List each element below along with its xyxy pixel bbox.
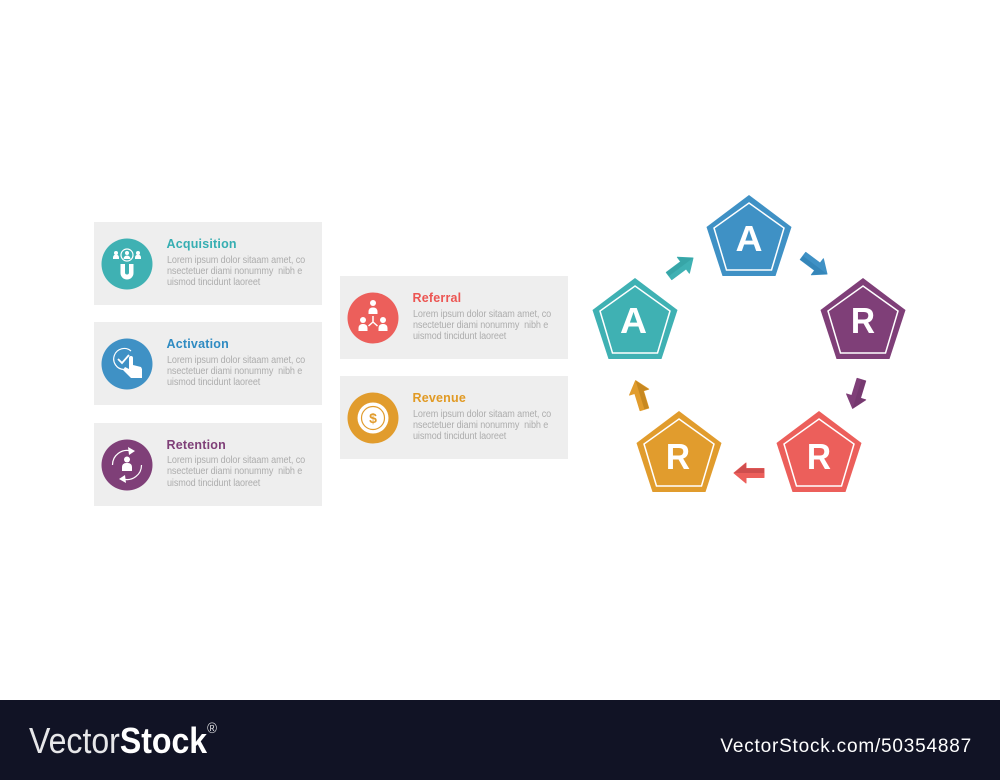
description: Lorem ipsum dolor sitaam amet, co nsectetuer diami nonummy nibh e uismod tincidunt laoreet — [166, 354, 305, 388]
heading: Revenue — [412, 391, 466, 405]
card: Acquisition — [94, 222, 322, 305]
heading: Acquisition — [166, 237, 237, 251]
description: Lorem ipsum dolor sitaam amet, co nsectetuer diami nonummy nibh e uismod tincidunt laoreet — [166, 254, 305, 288]
pentagon: Referral R: R — [807, 438, 831, 477]
pentagon: Retention R: R — [851, 302, 875, 341]
pentagon: Activation A: A — [735, 219, 763, 259]
pentagon: Acquisition A: A — [620, 301, 647, 341]
card: Retention — [94, 422, 322, 506]
description: Lorem ipsum dolor sitaam amet, co nsectetuer diami nonummy nibh e uismod tincidunt laoreet — [412, 408, 551, 442]
description: Lorem ipsum dolor sitaam amet, co nsectetuer diami nonummy nibh e uismod tincidunt laoreet — [412, 308, 551, 342]
heading: Activation — [166, 337, 229, 351]
watermark bar — [0, 700, 1000, 780]
icon: magnet attracting people — [102, 238, 152, 290]
card: Revenue — [340, 376, 568, 459]
pentagon: Referral R — [776, 411, 862, 492]
card: Activation — [94, 322, 322, 405]
icon: hand tapping checkmark — [102, 338, 152, 390]
arrow: blue to purple — [797, 248, 833, 282]
pentagon: Activation A — [706, 195, 792, 276]
image id: VectorStock.com/50354887 — [720, 736, 972, 757]
heading: Referral — [412, 291, 461, 305]
icon: referral network of people — [348, 292, 398, 344]
icon: dollar coin: $ — [369, 410, 377, 426]
description: Lorem ipsum dolor sitaam amet, co nsectetuer diami nonummy nibh e uismod tincidunt laoreet — [166, 455, 305, 489]
arrow: teal to blue — [663, 250, 699, 284]
arrow: red to orange — [734, 463, 764, 483]
heading: Retention — [166, 438, 226, 452]
pentagon: Acquisition A — [592, 278, 678, 359]
pentagon: Revenue R — [636, 411, 722, 492]
icon: person in cycle arrows — [102, 440, 152, 490]
icon: dollar coin — [348, 392, 398, 444]
pentagon: Retention R — [820, 278, 906, 359]
logo wordmark: VectorStock® — [29, 720, 217, 761]
arrow: purple to red — [843, 377, 871, 411]
card: Referral — [340, 276, 568, 359]
arrow: orange to teal — [626, 378, 654, 412]
pentagon: Revenue R: R — [666, 438, 690, 477]
